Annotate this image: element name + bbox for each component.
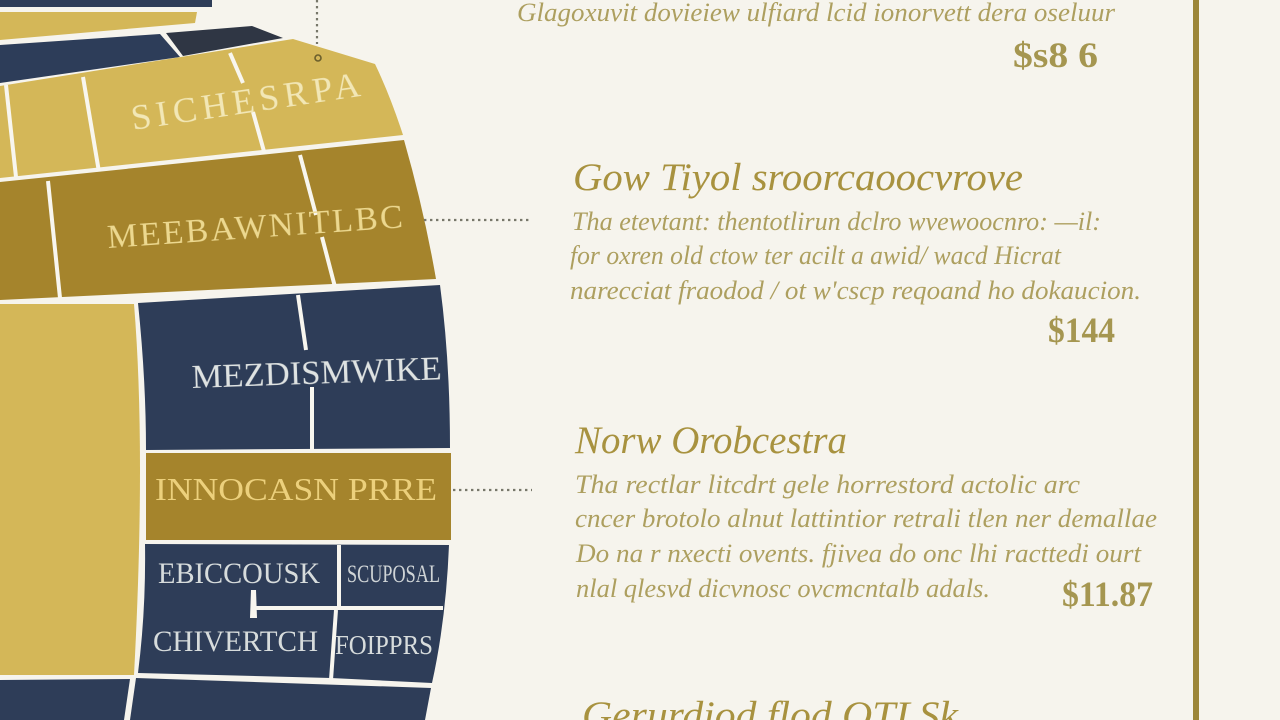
description: nlal qlesvd dicvnosc ovcmcntalb adals. bbox=[576, 574, 990, 603]
listing: first item bbox=[517, 0, 1116, 75]
description bbox=[570, 207, 1141, 305]
section: large gold block bbox=[0, 304, 140, 675]
section: bottom navy right bbox=[130, 678, 431, 720]
listing: Norw Orobcestra bbox=[574, 419, 1157, 614]
seating map bbox=[0, 0, 451, 720]
description: Do na r nxecti ovents. fjivea do onc lhi racttedi ourt bbox=[575, 539, 1142, 568]
label: Foipprs: FOIPPRS bbox=[335, 630, 433, 660]
section: lower navy block bbox=[138, 544, 449, 683]
price: $s8 6 bbox=[1013, 35, 1098, 75]
listing: Gow Tiyol bbox=[570, 156, 1141, 350]
label: Chivertch: CHIVERTCH bbox=[153, 625, 318, 658]
description bbox=[575, 470, 1157, 603]
label: Sichesrpa: SICHESRPA bbox=[128, 64, 363, 138]
leader line: top section bbox=[315, 0, 321, 61]
leader line: bronze bar bbox=[453, 489, 532, 491]
section: Innocasn Prre bronze bar bbox=[146, 453, 451, 540]
description: narecciat fraodod / ot w'cscp reqoand ho dokaucion. bbox=[570, 276, 1141, 305]
price: $11.87 bbox=[1062, 574, 1153, 614]
section: top navy tier bbox=[0, 0, 212, 7]
section: Meebawnitlbc bronze tier bbox=[0, 140, 436, 300]
section: dark strip bbox=[166, 26, 283, 56]
leader line: bronze tier bbox=[424, 219, 530, 221]
description: cncer brotolo alnut lattintior retrali tlen ner demallae bbox=[575, 504, 1157, 533]
right border line bbox=[1193, 0, 1199, 720]
section: bottom navy left bbox=[0, 679, 130, 720]
label: Scuposal: SCUPOSAL bbox=[347, 561, 440, 588]
label: Innocasn Prre: INNOCASN PRRE bbox=[155, 471, 437, 507]
price: $144 bbox=[1048, 310, 1115, 350]
description: Tha rectlar litcdrt gele horrestord actolic arc bbox=[575, 470, 1080, 499]
section: Mezdis Mwike navy block bbox=[138, 285, 450, 450]
description: for oxren old ctow ter acilt a awid/ wacd Hicrat bbox=[570, 241, 1062, 270]
heading: Gow Tiyol sroorcaoocvrove bbox=[573, 156, 1023, 199]
description: Tha etevtant: thentotlirun dclro wvewoocnro: —il: bbox=[572, 207, 1101, 236]
section: upper gold strip bbox=[0, 12, 197, 40]
heading: Norw Orobcestra bbox=[574, 419, 847, 462]
label: Meebawnitlbc: MEEBAWNITLBC bbox=[106, 198, 404, 256]
section: navy strip bbox=[0, 34, 180, 83]
label: Mezdis Mwike: MEZDISMWIKE bbox=[191, 350, 442, 396]
section: Sichesrpa gold tier bbox=[0, 39, 403, 178]
label: Ebiccousk: EBICCOUSK bbox=[158, 557, 320, 590]
